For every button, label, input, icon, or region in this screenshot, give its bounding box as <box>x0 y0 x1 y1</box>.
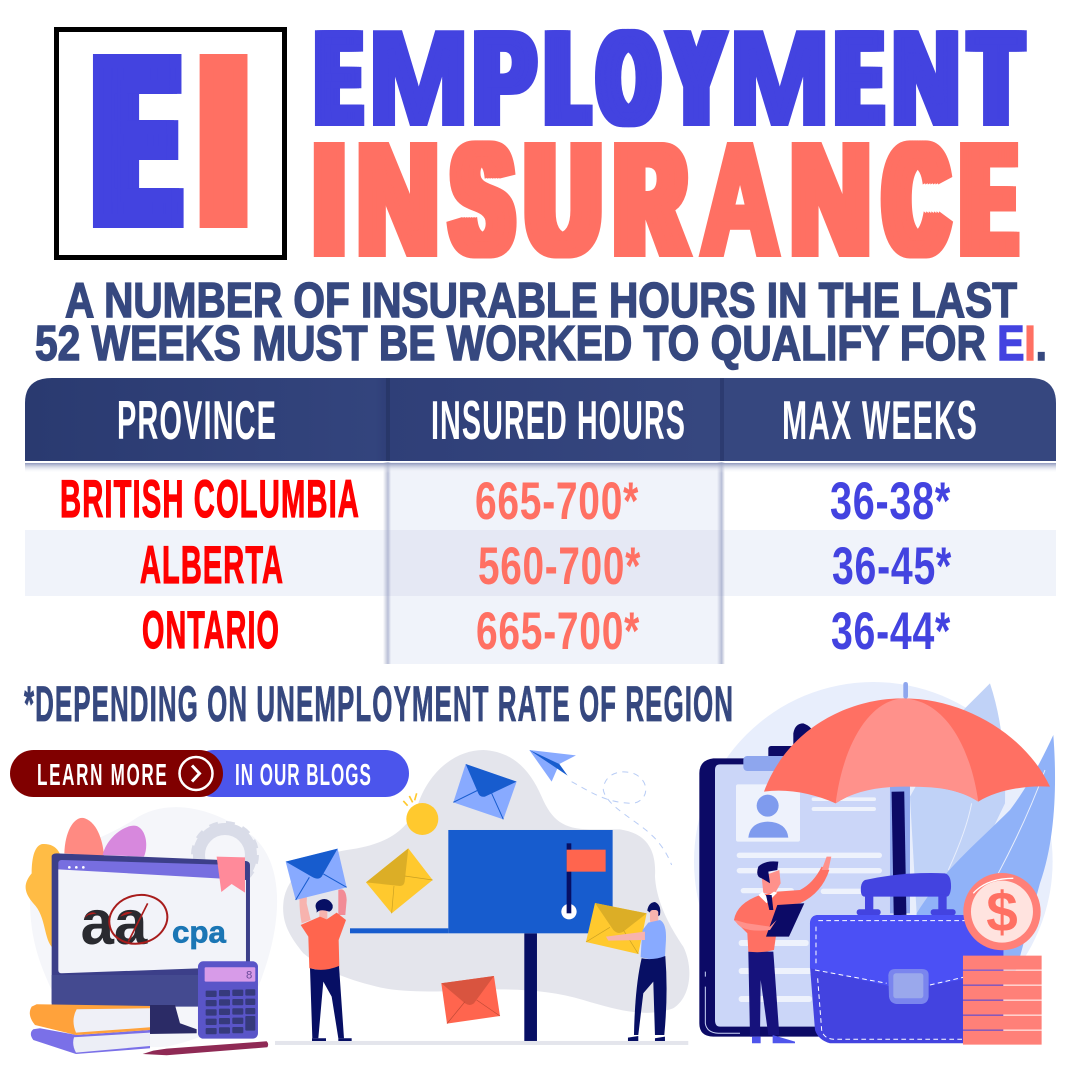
province names: ONTARIO <box>142 601 280 660</box>
clipboard <box>699 723 910 1037</box>
umbrella <box>764 682 1050 915</box>
max weeks: 36-38* <box>830 472 951 531</box>
aa cpa logo: cpa <box>172 915 227 949</box>
title line: EMPLOYMENT <box>319 6 1020 150</box>
aa cpa logo: aa <box>81 888 148 958</box>
insured hours: 560-700* <box>478 537 641 596</box>
logo: EI box <box>56 11 284 271</box>
title <box>307 6 1020 286</box>
illustration: computer with logo <box>26 807 277 1055</box>
table header: PROVINCE <box>117 389 277 451</box>
sun <box>403 793 438 835</box>
envelope: top blue <box>453 764 517 819</box>
title line: EMPLOYMENT: O <box>600 6 657 150</box>
title line: EMPLOYMENT: P <box>475 6 534 150</box>
illustration: umbrella, clipboard, briefcase <box>694 682 1055 1045</box>
mailbox <box>350 830 613 1041</box>
province names: ALBERTA <box>140 536 284 595</box>
learn more button: IN OUR BLOGS <box>235 758 371 792</box>
insured hours: 665-700* <box>475 472 639 531</box>
title line: EMPLOYMENT: N <box>893 6 959 150</box>
subtitle <box>35 274 1047 371</box>
title line: INSURANCE <box>307 112 1012 286</box>
title line: INSURANCE: I <box>307 112 351 286</box>
province names <box>60 470 360 660</box>
title line: INSURANCE: N <box>358 112 438 286</box>
title line: INSURANCE: N <box>791 112 870 286</box>
calculator <box>198 961 258 1039</box>
max weeks: 36-44* <box>831 602 951 661</box>
insured hours <box>475 472 641 661</box>
title line: EMPLOYMENT: T <box>972 6 1020 150</box>
learn more button <box>10 750 409 797</box>
calculator: 8 <box>246 970 252 982</box>
coins with dollar: $ <box>986 882 1018 945</box>
max weeks: 36-45* <box>832 537 952 596</box>
logo: EI box: I <box>191 11 256 271</box>
books <box>30 1004 150 1054</box>
logo: EI box: E <box>101 11 172 271</box>
insured hours: 665-700* <box>476 602 640 661</box>
briefcase <box>810 873 1003 1043</box>
envelope: coral <box>441 976 500 1024</box>
person left holding envelope <box>286 849 352 1041</box>
illustration: mailbox with people and envelopes <box>275 750 689 1045</box>
max weeks <box>830 472 952 661</box>
person with clipboard <box>734 857 831 1043</box>
envelope: yellow <box>366 848 433 913</box>
aa cpa logo <box>81 888 227 958</box>
province names: BRITISH COLUMBIA <box>60 470 360 529</box>
title line: EMPLOYMENT: M <box>729 6 830 150</box>
coins with dollar <box>963 873 1042 1045</box>
table header <box>25 378 1056 461</box>
title line: EMPLOYMENT: E <box>840 6 879 150</box>
title line: INSURANCE: R <box>617 112 684 286</box>
table <box>25 378 1056 664</box>
person right holding envelope <box>586 902 667 1041</box>
table header: INSURED HOURS <box>431 389 686 451</box>
title line: INSURANCE: U <box>527 112 600 286</box>
paper plane <box>529 750 672 865</box>
title line: INSURANCE: A <box>702 112 778 286</box>
title line: EMPLOYMENT: L <box>549 6 586 150</box>
title line: INSURANCE: S <box>454 112 510 286</box>
title line: EMPLOYMENT: Y <box>671 6 722 150</box>
learn more button: LEARN MORE <box>37 758 167 792</box>
title line: INSURANCE: C <box>887 112 945 286</box>
title line: EMPLOYMENT: E <box>319 6 358 150</box>
title: E <box>965 112 1012 286</box>
pencil <box>143 1041 268 1055</box>
title line: EMPLOYMENT: M <box>368 6 469 150</box>
